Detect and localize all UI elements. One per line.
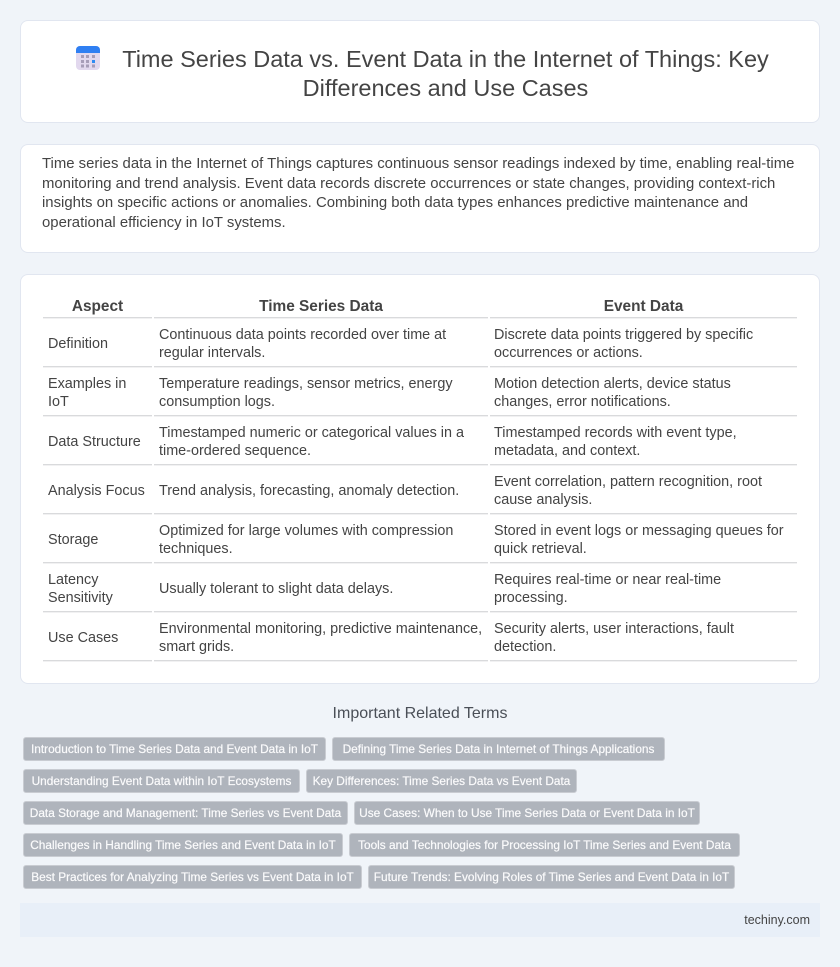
row: Data Structure: Timestamped records with event type, — [494, 425, 737, 441]
row: Examples in IoT: Temperature readings, sensor metrics, energy — [159, 376, 453, 392]
row: Definition: Definition — [48, 336, 108, 352]
row: Examples in IoT: Motion detection alerts, device status — [494, 376, 731, 392]
row: Storage: techniques. — [159, 541, 233, 557]
related term tags — [23, 737, 740, 889]
intro text: Time series data in the Internet of Things captures continuous sensor readings indexed by time, enabling real-time — [42, 156, 794, 172]
row: Examples in IoT: consumption logs. — [159, 394, 275, 410]
row: Latency Sensitivity: Requires real-time or near real-time — [494, 572, 721, 588]
heading: important related terms: Important Related Terms — [333, 705, 507, 722]
row: Data Structure — [48, 425, 737, 459]
related term tags: Defining Time Series Data in Internet of Things Applications — [343, 742, 654, 756]
related term tags: Best Practices for Analyzing Time Series vs Event Data in IoT — [31, 870, 354, 884]
row: Analysis Focus: Trend analysis, forecasting, anomaly detection. — [159, 483, 459, 499]
row: Use Cases: detection. — [494, 639, 556, 655]
row: Latency Sensitivity: Usually tolerant to slight data delays. — [159, 581, 393, 597]
row: Use Cases — [48, 621, 734, 655]
row: Storage: Storage — [48, 532, 98, 548]
intro text: monitoring and trend analysis. Event data records discrete occurrences or state changes, providing context-rich — [42, 176, 775, 192]
row: Analysis Focus — [48, 474, 762, 508]
row: Latency Sensitivity — [48, 572, 721, 606]
row: Storage: Optimized for large volumes with compression — [159, 523, 453, 539]
row: Analysis Focus: Analysis Focus — [48, 483, 145, 499]
row: Examples in IoT — [48, 376, 731, 410]
title — [122, 46, 769, 100]
row: Data Structure: time-ordered sequence. — [159, 443, 311, 459]
intro text: operational efficiency in IoT systems. — [42, 214, 286, 230]
panel: comparison table — [20, 274, 820, 684]
table: header row — [72, 298, 684, 315]
row: Storage — [48, 523, 784, 557]
row: Examples in IoT: changes, error notifications. — [494, 394, 671, 410]
icon: calendar — [76, 46, 100, 70]
row: Storage: Stored in event logs or messaging queues for — [494, 523, 784, 539]
row: Data Structure: metadata, and context. — [494, 443, 640, 459]
footer source text: techiny.com — [744, 913, 810, 927]
intro text: insights on specific actions or anomalies. Combining both data types enhances predictive maintenance and — [42, 195, 748, 211]
row: Latency Sensitivity: Sensitivity — [48, 590, 113, 606]
intro text — [42, 156, 794, 230]
panel: introduction paragraph — [20, 144, 820, 253]
row: Use Cases: Use Cases — [48, 630, 118, 646]
row: Examples in IoT: IoT — [48, 394, 69, 410]
table: header row: Aspect — [72, 298, 123, 315]
row: Storage: quick retrieval. — [494, 541, 587, 557]
footer — [20, 903, 820, 937]
related term tags: Key Differences: Time Series Data vs Event Data — [313, 774, 570, 788]
related term tags: Data Storage and Management: Time Series vs Event Data — [30, 806, 341, 820]
row: Use Cases: Security alerts, user interactions, fault — [494, 621, 734, 637]
row: Definition: regular intervals. — [159, 345, 265, 361]
row: Use Cases: Environmental monitoring, predictive maintenance, — [159, 621, 482, 637]
title: Time Series Data vs. Event Data in the Internet of Things: Key — [122, 46, 769, 72]
panel: title header — [20, 20, 820, 123]
row: Definition — [48, 327, 753, 361]
row: Definition: Discrete data points triggered by specific — [494, 327, 753, 343]
table: header row: Time Series Data — [259, 298, 383, 315]
related term tags: Challenges in Handling Time Series and Event Data in IoT — [30, 838, 336, 852]
row: Data Structure: Timestamped numeric or categorical values in a — [159, 425, 464, 441]
row: Definition: occurrences or actions. — [494, 345, 643, 361]
row: Latency Sensitivity: Latency — [48, 572, 98, 588]
title: Differences and Use Cases — [303, 74, 588, 100]
row: Examples in IoT: Examples in — [48, 376, 126, 392]
related term tags: Use Cases: When to Use Time Series Data or Event Data in IoT — [359, 806, 695, 820]
row: Latency Sensitivity: processing. — [494, 590, 568, 606]
row: Analysis Focus: cause analysis. — [494, 492, 592, 508]
row: Analysis Focus: Event correlation, pattern recognition, root — [494, 474, 762, 490]
table: header row: Event Data — [604, 298, 683, 315]
related term tags: Introduction to Time Series Data and Event Data in IoT — [31, 742, 318, 756]
related term tags: Tools and Technologies for Processing IoT Time Series and Event Data — [358, 838, 731, 852]
related term tags: Understanding Event Data within IoT Ecosystems — [32, 774, 291, 788]
row: Definition: Continuous data points recorded over time at — [159, 327, 446, 343]
row: Data Structure: Data Structure — [48, 434, 141, 450]
row: Use Cases: smart grids. — [159, 639, 234, 655]
related term tags: Future Trends: Evolving Roles of Time Series and Event Data in IoT — [374, 870, 729, 884]
